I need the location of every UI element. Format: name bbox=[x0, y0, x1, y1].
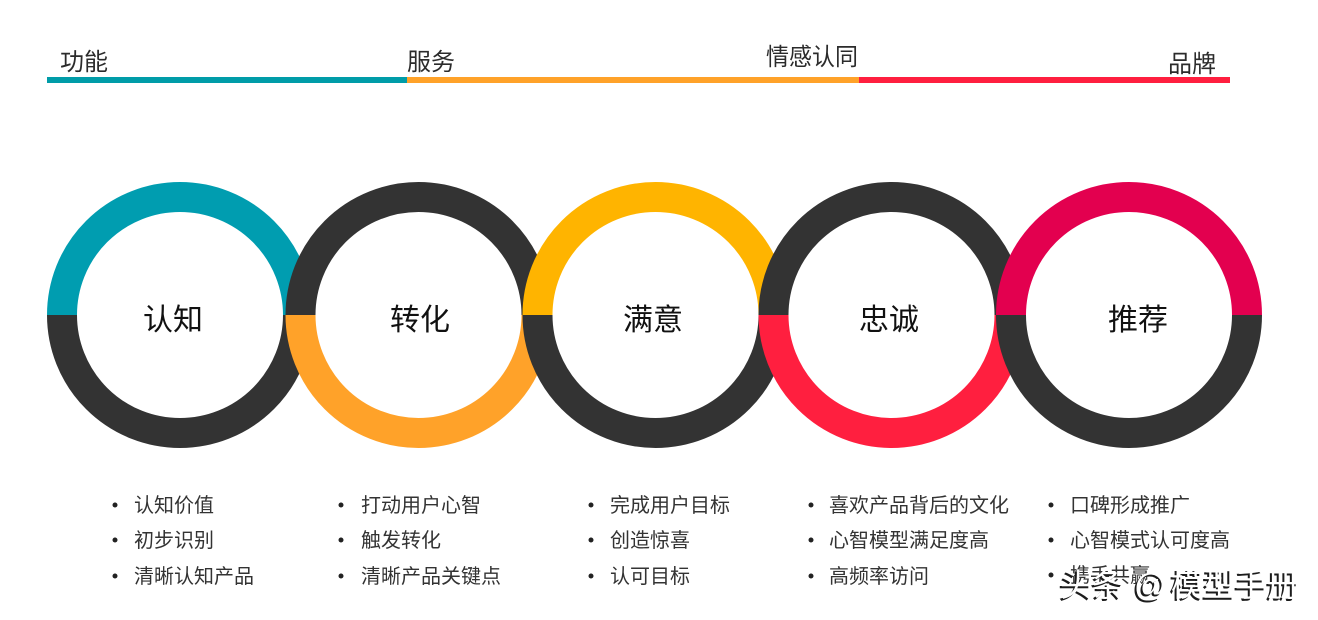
ring: 忠诚 bbox=[774, 197, 1010, 433]
ring: 满意 bbox=[538, 197, 774, 433]
ring: 推荐: 推荐 bbox=[1108, 304, 1168, 337]
bullet list: 满意: 认可目标 bbox=[610, 565, 690, 588]
bullet list: 转化: 清晰产品关键点 bbox=[361, 565, 501, 588]
ring: 认知: 认知 bbox=[143, 304, 203, 337]
bullet list: 转化: 打动用户心智 bbox=[361, 494, 481, 517]
bullet list: 忠诚 bbox=[808, 494, 1009, 588]
stage label: 功能: 功能 bbox=[60, 49, 108, 76]
bullet list: 认知: 清晰认知产品 bbox=[134, 565, 254, 588]
bullet list: 忠诚: 心智模型满足度高 bbox=[829, 529, 989, 552]
stage timeline header bbox=[47, 44, 1230, 83]
ring: 认知 bbox=[62, 197, 298, 433]
bullet list: 满意: 完成用户目标 bbox=[610, 494, 730, 517]
bullet list: 推荐 bbox=[1048, 494, 1230, 587]
ring: 满意: 满意 bbox=[623, 304, 683, 337]
ring: 推荐 bbox=[1011, 197, 1247, 433]
bullet list: 转化: 触发转化 bbox=[361, 529, 441, 552]
timeline bar: teal segment bbox=[47, 77, 407, 83]
ring: 转化: 转化 bbox=[390, 304, 450, 337]
bullet list: 认知: 初步识别 bbox=[134, 529, 214, 552]
bullet list: 满意 bbox=[588, 494, 730, 588]
bullet list: 认知: 认知价值 bbox=[134, 494, 214, 517]
bullet list: 忠诚: 高频率访问 bbox=[829, 565, 929, 588]
bullet list: 转化 bbox=[338, 494, 501, 588]
chain of five rings bbox=[62, 197, 1247, 433]
timeline bar: orange segment bbox=[407, 77, 859, 83]
watermark: 模型手册 bbox=[1171, 567, 1299, 603]
watermark: 头条 bbox=[1060, 567, 1124, 603]
watermark: @ bbox=[1134, 567, 1166, 603]
stage label: 品牌: 品牌 bbox=[1168, 51, 1216, 78]
bullet list: 认知 bbox=[112, 494, 254, 588]
bullet list: 推荐: 携手共赢 bbox=[1070, 564, 1150, 587]
stage label: 服务: 服务 bbox=[407, 49, 455, 76]
bullet list: 推荐: 口碑形成推广 bbox=[1070, 494, 1190, 517]
bullet list: 满意: 创造惊喜 bbox=[610, 529, 690, 552]
bullet list: 推荐: 心智模式认可度高 bbox=[1070, 529, 1230, 552]
ring: 转化 bbox=[300, 197, 536, 433]
ring: 忠诚: 忠诚 bbox=[859, 304, 919, 337]
bullet list: 忠诚: 喜欢产品背后的文化 bbox=[829, 494, 1009, 517]
timeline bar: red segment bbox=[859, 77, 1230, 83]
stage label: 情感认同: 情感认同 bbox=[766, 44, 858, 71]
